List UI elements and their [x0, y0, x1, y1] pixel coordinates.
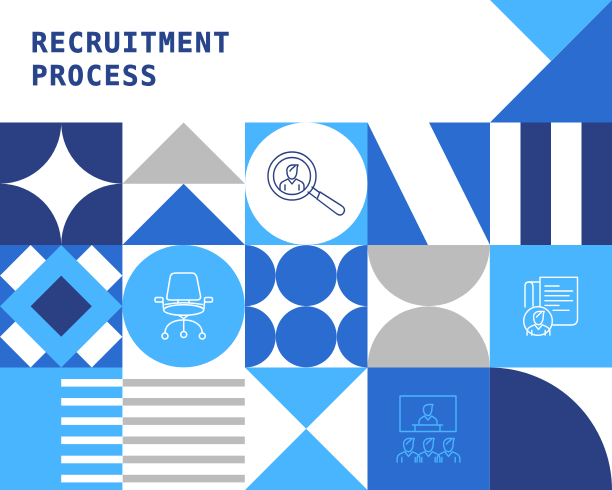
tile: grey stripes: [123, 379, 245, 482]
tile: stacked triangles: [122, 122, 245, 245]
tile: nested diamonds: [0, 245, 122, 368]
title: [31, 27, 231, 92]
tile: grey half circles: [368, 245, 490, 368]
tile: magnifier on white circle: [245, 122, 368, 245]
icon: resume document: [524, 277, 578, 335]
tile: navy quarter circle: [490, 368, 612, 490]
title: RECRUITMENT: [31, 27, 231, 59]
tile: vertical stripes: [520, 122, 612, 245]
top right triangles: [490, 0, 612, 122]
tile: light blue with white stripes: [0, 368, 122, 490]
tile: office chair on blue circle: [122, 245, 245, 367]
icon: magnifying glass with candidate: [268, 152, 344, 215]
icon: office chair: [155, 273, 212, 339]
icon: presenter and audience: [397, 396, 460, 462]
title: PROCESS: [31, 60, 158, 92]
tile: hourglass triangles: [245, 368, 368, 490]
tile: diagonal triangles: [368, 122, 490, 245]
tile: presentation audience: [368, 368, 490, 490]
tile: document with candidate: [490, 245, 612, 368]
tile: blue circles: [245, 245, 368, 368]
tile: navy corners with white star: [0, 122, 122, 245]
